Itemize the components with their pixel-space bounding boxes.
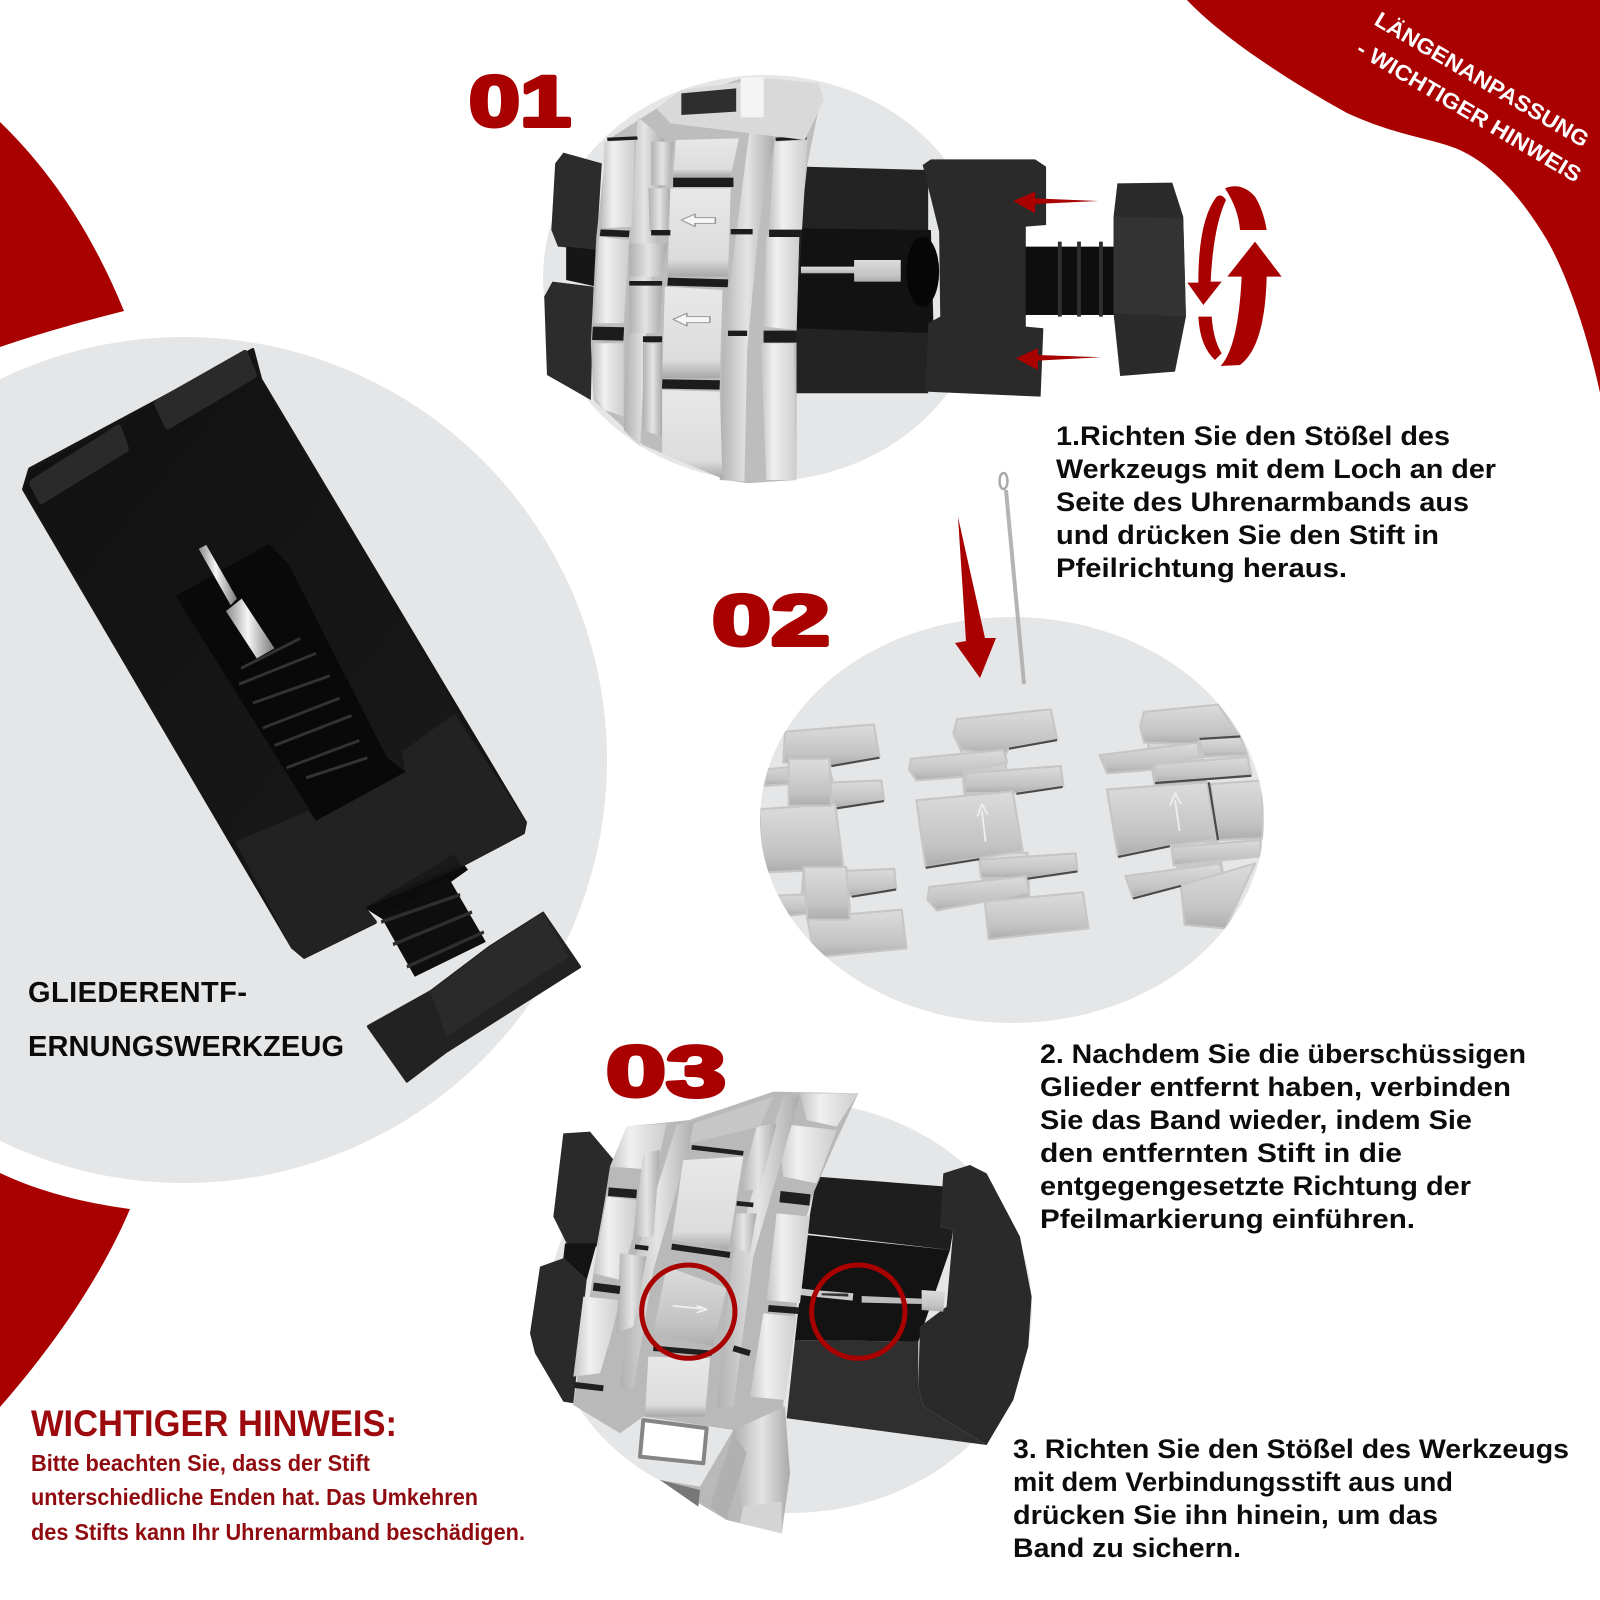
grip pads <box>544 153 602 400</box>
screw thread <box>381 877 486 977</box>
step 1 instructions: 1.Richten Sie den Stößel des <box>1056 421 1450 451</box>
grip pads <box>32 354 254 500</box>
step 2 instructions: entgegengesetzte Richtung der <box>1040 1171 1472 1201</box>
grip pads <box>530 1132 617 1403</box>
link removal tool photo <box>24 350 580 1081</box>
link shadows <box>831 736 1251 899</box>
corner title <box>1352 7 1593 187</box>
link arrows <box>978 793 1181 842</box>
spring <box>239 638 367 778</box>
tool channel <box>791 167 934 393</box>
tool block <box>918 1165 1032 1445</box>
step 2 instructions: Pfeilmarkierung einführen. <box>1040 1204 1415 1234</box>
background: top-right red corner <box>1187 0 1600 393</box>
red push arrows <box>1013 192 1101 370</box>
step number 01: 01 <box>469 63 571 142</box>
note body: des Stifts kann Ihr Uhrenarmband beschädigen. <box>31 1519 525 1545</box>
pin <box>199 545 275 658</box>
front block <box>237 716 525 957</box>
tool base plate <box>24 350 525 957</box>
note body: unterschiedliche Enden hat. Das Umkehren <box>31 1484 478 1510</box>
collar <box>906 237 939 307</box>
step 1 instructions: Werkzeugs mit dem Loch an der <box>1056 454 1497 484</box>
step number 02: 02 <box>712 582 830 661</box>
band strips <box>617 1097 800 1407</box>
step 1 instructions: und drücken Sie den Stift in <box>1056 520 1439 550</box>
tool and band photo <box>530 1092 1032 1533</box>
step 2 instructions: 2. Nachdem Sie die überschüssigen <box>1040 1039 1526 1069</box>
grey circle backdrop <box>760 617 1264 1023</box>
tool front wall <box>787 1340 987 1445</box>
band centre links <box>662 138 739 478</box>
highlight circle: pin <box>812 1265 905 1358</box>
panel: step 2 <box>712 473 1526 1234</box>
knob <box>1114 183 1186 376</box>
screw socket <box>363 852 468 925</box>
tool and band photo <box>544 77 1186 483</box>
callout: important note <box>31 1403 525 1545</box>
band base <box>573 1092 858 1533</box>
highlight circle: band arrow <box>642 1265 735 1358</box>
icon: cotter pin <box>1000 473 1024 684</box>
step 3 instructions: Band zu sichern. <box>1013 1533 1241 1563</box>
step 2 instructions: den entfernten Stift in die <box>1040 1138 1402 1168</box>
tool channel <box>795 1235 950 1342</box>
band centre links <box>645 1097 773 1417</box>
background: lower-left red shape <box>0 1173 130 1407</box>
panel: step 1 <box>469 63 1497 583</box>
corner title line 2: - WICHTIGER HINWEIS <box>1352 36 1586 187</box>
step 1 instructions: Seite des Uhrenarmbands aus <box>1056 487 1469 517</box>
step 3 instructions: 3. Richten Sie den Stößel des Werkzeugs <box>1013 1434 1569 1464</box>
pin <box>801 260 901 282</box>
step 3 instructions <box>1013 1434 1569 1563</box>
grey circle backdrop <box>543 75 987 481</box>
note body <box>31 1450 525 1545</box>
band inner strips <box>624 107 775 482</box>
band link gaps <box>592 138 806 385</box>
band clasp <box>657 77 824 140</box>
tool label line 2: ERNUNGSWERKZEUG <box>28 1031 344 1063</box>
step 2 instructions: Sie das Band wieder, indem Sie <box>1040 1105 1472 1135</box>
note heading: WICHTIGER HINWEIS: <box>31 1403 397 1444</box>
step 2 instructions: Glieder entfernt haben, verbinden <box>1040 1072 1511 1102</box>
grey circle backdrop <box>0 337 607 1183</box>
step number 03: 03 <box>606 1033 726 1112</box>
panel: step 3 <box>530 1033 1569 1563</box>
icon: rotation arrows <box>1187 186 1282 366</box>
band outer links <box>573 1093 858 1400</box>
panel: tool overview <box>0 337 607 1183</box>
step 3 instructions: mit dem Verbindungsstift aus und <box>1013 1467 1453 1497</box>
tool label <box>28 977 344 1063</box>
recess <box>176 544 407 823</box>
tool back wall <box>807 1177 953 1250</box>
knob <box>368 913 580 1081</box>
step 1 instructions: Pfeilrichtung heraus. <box>1056 553 1347 583</box>
step 2 instructions <box>1040 1039 1526 1234</box>
corner title line 1: LÄNGENANPASSUNG <box>1370 7 1593 152</box>
screw thread <box>1016 242 1120 317</box>
band clasp <box>640 1407 790 1533</box>
note body: Bitte beachten Sie, dass der Stift <box>31 1450 370 1476</box>
arrow on link <box>673 1306 707 1313</box>
tool label line 1: GLIEDERENTF- <box>28 977 247 1009</box>
grey circle backdrop <box>548 1101 1032 1513</box>
band outer links <box>594 140 807 480</box>
middle link <box>909 709 1088 939</box>
pin pieces <box>800 1288 945 1312</box>
band base <box>591 78 821 483</box>
separated band links <box>759 705 1262 957</box>
left link <box>759 725 906 957</box>
direction arrows on band <box>673 214 715 326</box>
step 1 instructions <box>1056 421 1497 583</box>
block <box>923 159 1046 397</box>
step 3 instructions: drücken Sie ihn hinein, um das <box>1013 1500 1438 1530</box>
right link <box>1100 705 1262 928</box>
background: upper-left red shape <box>0 122 124 347</box>
icon: red down arrow <box>955 517 996 678</box>
band link gaps <box>575 1147 810 1388</box>
